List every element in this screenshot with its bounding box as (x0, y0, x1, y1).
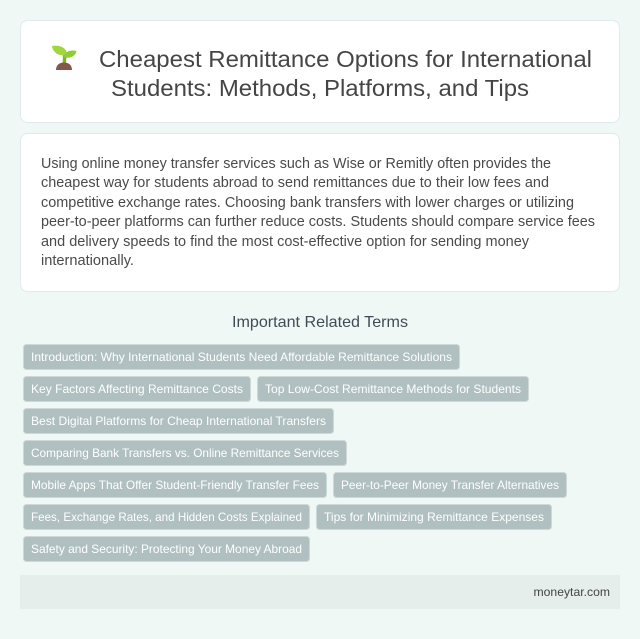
tag: safety and security: Safety and Security: Protecting Your Money Abroad (31, 542, 302, 556)
panel: title card (20, 20, 620, 122)
icon: sprout (52, 46, 76, 70)
text block: summary paragraph: Using online money transfer services such as Wise or Remitly often provides the (41, 156, 551, 172)
tag: best digital platforms (24, 408, 334, 434)
tag: top low-cost methods: Top Low-Cost Remittance Methods for Students (265, 382, 521, 396)
tag: introduction: Introduction: Why International Students Need Affordable Remittance Solutions (31, 350, 452, 364)
tag: comparing bank transfers (24, 440, 346, 466)
tag: top low-cost methods (258, 376, 528, 402)
tag: key factors (24, 376, 250, 402)
tag: tips: Tips for Minimizing Remittance Expenses (324, 510, 544, 524)
heading: important related terms: Important Related Terms (232, 314, 408, 331)
text block: summary paragraph (41, 156, 595, 269)
tag: introduction (24, 344, 460, 370)
tag: safety and security (24, 536, 310, 562)
footer text: site name: moneytar.com (534, 585, 610, 599)
tag list (24, 344, 566, 562)
tag: peer-to-peer (334, 472, 566, 498)
title: Students: Methods, Platforms, and Tips (111, 75, 529, 101)
footer (20, 575, 620, 609)
tag: peer-to-peer: Peer-to-Peer Money Transfer Alternatives (341, 478, 559, 492)
text block: summary paragraph: and delivery speeds to find the most cost-effective option for sending money (41, 234, 530, 250)
title: Cheapest Remittance Options for International (99, 46, 592, 72)
text block: summary paragraph: peer-to-peer platforms can further reduce costs. Students should compare service fees (41, 214, 595, 230)
tag: mobile apps (24, 472, 326, 498)
tag: best digital platforms: Best Digital Platforms for Cheap International Transfers (31, 414, 326, 428)
panel: summary card (20, 134, 620, 292)
title (99, 46, 592, 101)
text block: summary paragraph: cheapest way for students abroad to send remittances due to their low fees and (41, 175, 549, 191)
text block: summary paragraph: competitive exchange rates. Choosing bank transfers with lower charges or utilizing (41, 195, 574, 211)
tag: tips (316, 504, 552, 530)
text block: summary paragraph: internationally. (41, 253, 134, 269)
tag: comparing bank transfers: Comparing Bank Transfers vs. Online Remittance Services (31, 446, 339, 460)
tag: mobile apps: Mobile Apps That Offer Student-Friendly Transfer Fees (31, 478, 319, 492)
tag: fees and exchange rates (24, 504, 310, 530)
tag: fees and exchange rates: Fees, Exchange Rates, and Hidden Costs Explained (31, 510, 302, 524)
tag: key factors: Key Factors Affecting Remittance Costs (31, 382, 243, 396)
